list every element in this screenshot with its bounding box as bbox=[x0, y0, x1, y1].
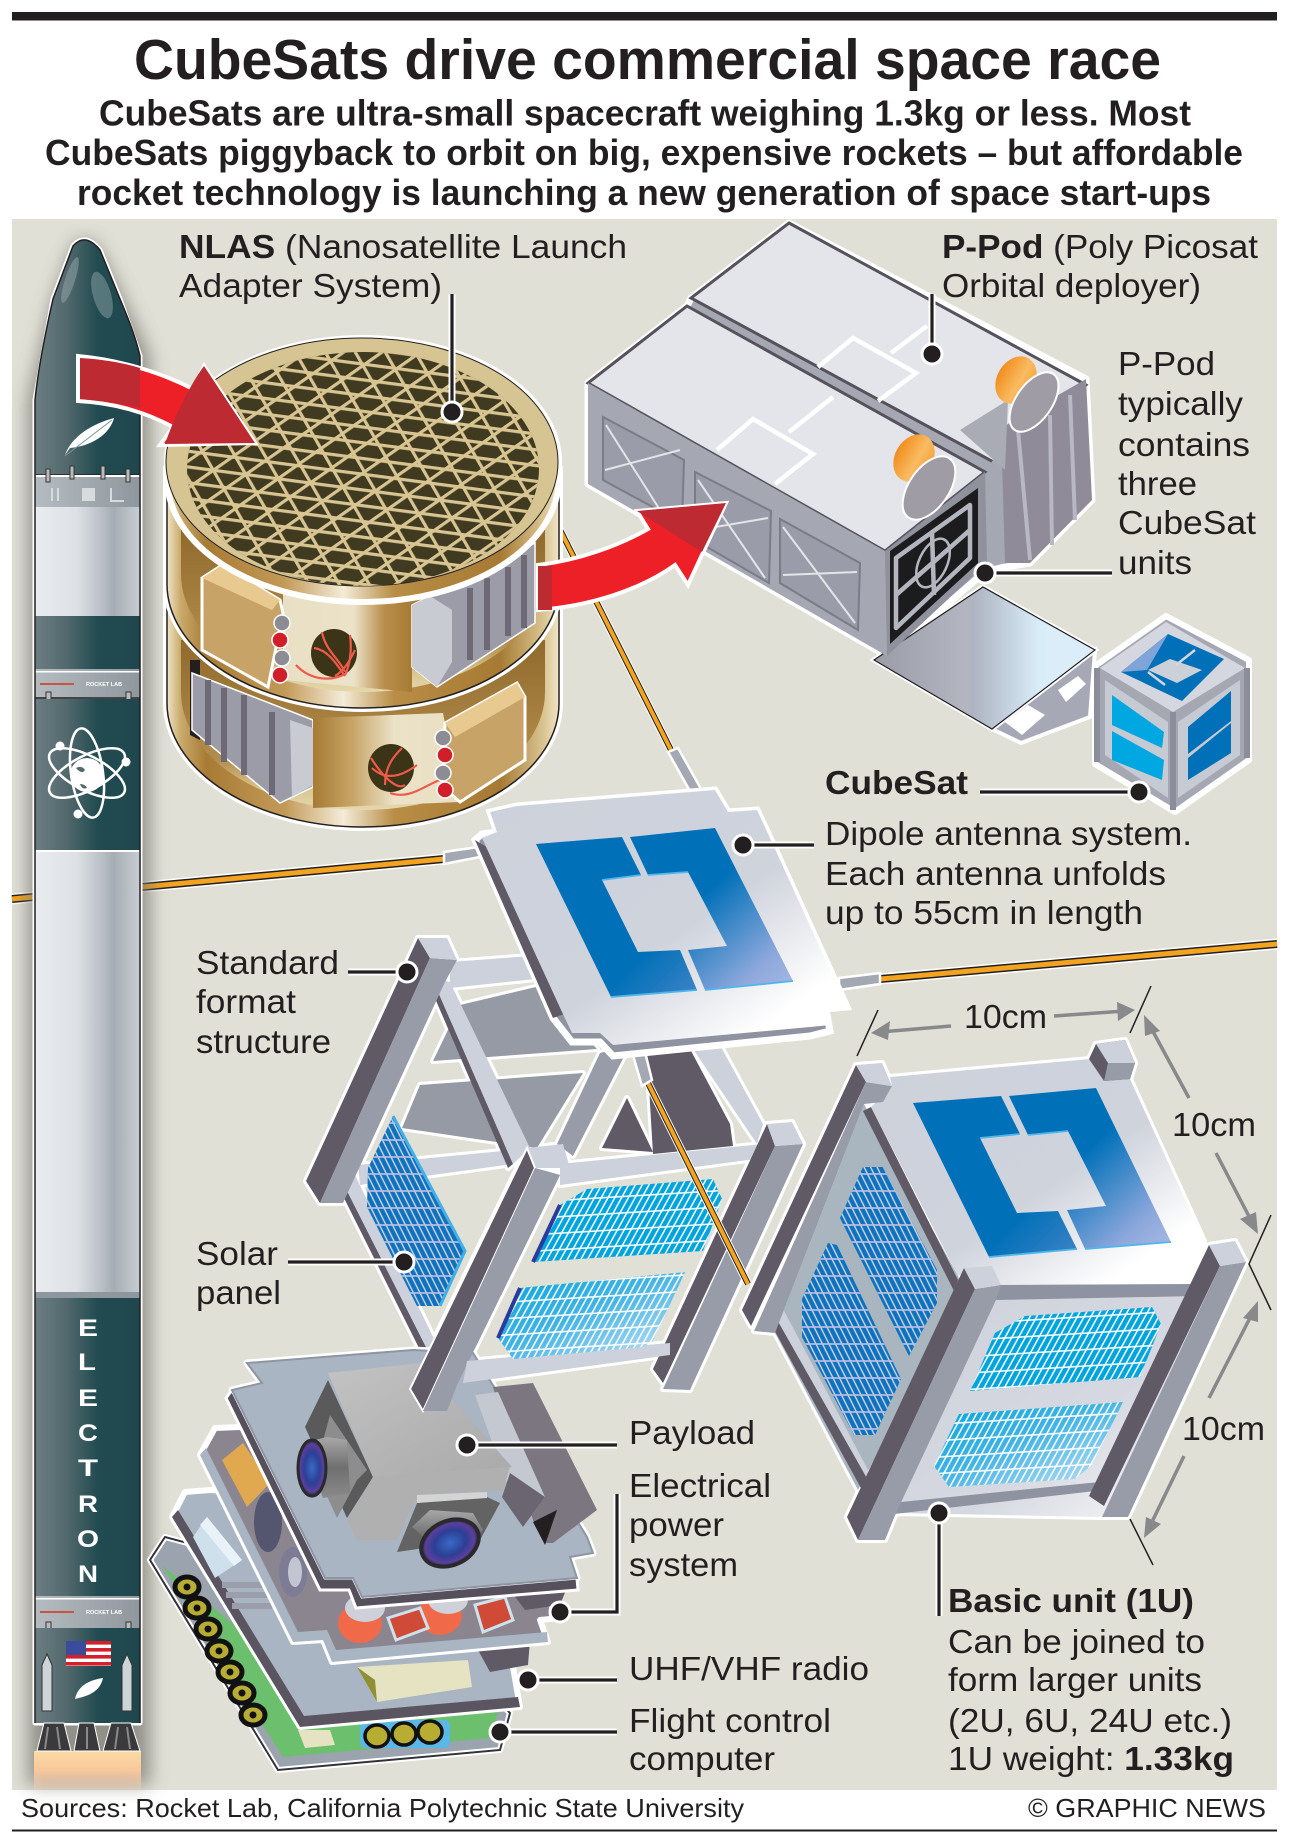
lower dark recess bbox=[190, 660, 200, 740]
orange cylinder rear bbox=[987, 349, 1068, 440]
label: solar panel: Solar bbox=[196, 1236, 278, 1273]
label: basic unit: (2U, 6U, 24U etc.) bbox=[948, 1703, 1232, 1740]
icon: small fern bbox=[75, 1678, 103, 1699]
label: NLAS bbox=[179, 229, 627, 305]
bottom rule bbox=[12, 1830, 1277, 1832]
lower floor bbox=[181, 640, 545, 810]
leader: solar panel bbox=[288, 1252, 414, 1272]
right depth arrow bbox=[1144, 1015, 1258, 1234]
label: NLAS: Adapter System) bbox=[179, 268, 442, 305]
ELECTRON lettering: R bbox=[78, 1491, 98, 1518]
label: solar panel bbox=[196, 1236, 281, 1312]
rear shadow bbox=[960, 400, 1008, 470]
dark cylinder bbox=[254, 1492, 307, 1597]
dimension label lower: 10cm bbox=[1182, 1411, 1265, 1448]
end frame bbox=[885, 472, 987, 656]
label: NLAS: NLAS (Nanosatellite Launch bbox=[179, 229, 627, 266]
camera payload bbox=[298, 1363, 512, 1576]
leader: P-Pod units bbox=[975, 563, 1112, 583]
label: basic unit: form larger units bbox=[948, 1662, 1202, 1699]
upper band bbox=[35, 466, 140, 507]
coil 2 bbox=[418, 1586, 468, 1635]
white crystal box bbox=[193, 1517, 242, 1578]
camera body top bbox=[328, 1363, 512, 1477]
arrow shaded tail bbox=[80, 358, 140, 408]
credit: © GRAPHIC NEWS bbox=[1028, 1793, 1266, 1823]
bus pipes bbox=[222, 1585, 272, 1606]
window outlines bbox=[717, 326, 927, 484]
base section bbox=[35, 1628, 140, 1723]
rocket silhouette bbox=[35, 240, 140, 1723]
label: structure bbox=[196, 945, 339, 1061]
small cube silhouette bbox=[1095, 616, 1249, 812]
door bracket bbox=[992, 650, 1095, 743]
frame front lower corner over stack bbox=[410, 1148, 670, 1411]
icon: atom and globe bbox=[42, 726, 132, 820]
leader: radio bbox=[518, 1670, 617, 1690]
side mount plate bbox=[315, 1415, 367, 1518]
label: dipole antenna bbox=[825, 816, 1192, 932]
leader: electrical power bbox=[550, 1494, 617, 1622]
engines bbox=[37, 1723, 140, 1751]
cube logo right piece bbox=[1009, 1088, 1171, 1249]
label: P-Pod: Orbital deployer) bbox=[942, 268, 1201, 305]
dimension label top: 10cm bbox=[964, 999, 1047, 1036]
lower rocket lab band: ROCKET LAB bbox=[86, 1610, 122, 1616]
subtitle: CubeSats piggyback to orbit on big, expensive rockets – but affordable bbox=[45, 132, 1243, 173]
label: flight control computer: computer bbox=[629, 1741, 775, 1778]
orange cylinder front bbox=[885, 427, 966, 529]
label: electrical power system: power bbox=[629, 1507, 724, 1544]
leader: structure bbox=[348, 962, 417, 982]
plate silhouette bbox=[475, 790, 847, 1056]
arrow shaded tip bbox=[637, 503, 726, 552]
nose cone bbox=[35, 240, 140, 475]
rocket shadow bbox=[28, 240, 150, 1785]
plate top face bbox=[482, 790, 847, 1045]
leader: dipole bbox=[733, 835, 814, 855]
label: P-Pod contents: contains bbox=[1118, 427, 1250, 464]
logo right piece bbox=[630, 828, 793, 990]
end opening bbox=[890, 488, 978, 644]
label: P-Pod contents: P-Pod bbox=[1118, 346, 1215, 383]
standard format frame bbox=[306, 938, 803, 1411]
label: dipole antenna: up to 55cm in length bbox=[825, 895, 1143, 932]
dipole antenna plate bbox=[444, 748, 880, 1086]
ELECTRON lettering: T bbox=[78, 1455, 98, 1482]
lower drum bbox=[167, 590, 559, 827]
label: P-Pod: P-Pod (Poly Picosat bbox=[942, 229, 1259, 266]
arrow shaded tip bbox=[165, 366, 255, 444]
small cube edges bbox=[1097, 668, 1247, 810]
label: dipole antenna: Each antenna unfolds bbox=[825, 856, 1166, 893]
camera dark side bbox=[305, 1380, 373, 1518]
label: P-Pod contents: CubeSat bbox=[1118, 505, 1257, 542]
solar panel: frame left bbox=[367, 1116, 465, 1306]
dark stage section bbox=[35, 616, 140, 669]
top width arrow bbox=[871, 1002, 1135, 1040]
UHF/VHF radio board bbox=[172, 1490, 530, 1727]
label: solar panel: panel bbox=[196, 1275, 281, 1312]
silver main tank bbox=[35, 850, 140, 1298]
bottom connector bbox=[360, 1720, 450, 1748]
pod silhouette bbox=[588, 223, 1092, 656]
coil 1 bbox=[338, 1594, 385, 1643]
label: dipole antenna: Dipole antenna system. bbox=[825, 816, 1192, 853]
small CubeSat bbox=[1095, 616, 1249, 812]
logo highlights bbox=[602, 872, 793, 997]
ELECTRON lettering: O bbox=[77, 1526, 99, 1553]
solar panel: frame lower right bbox=[498, 1272, 685, 1359]
right height arrow bbox=[1144, 1301, 1258, 1538]
cube logo highlights bbox=[980, 1131, 1171, 1257]
door panel bbox=[874, 587, 1095, 729]
ELECTRON lettering: L bbox=[78, 1349, 96, 1376]
lens barrel left bbox=[303, 1437, 350, 1498]
label: P-Pod bbox=[942, 229, 1259, 305]
label: basic unit: Can be joined to bbox=[948, 1624, 1205, 1661]
upper floor bbox=[181, 530, 545, 692]
antenna stubs bbox=[444, 748, 880, 1086]
upper electronics box bbox=[202, 565, 290, 687]
lower cable port bbox=[368, 744, 440, 795]
arrow: rocket to NLAS bbox=[78, 356, 255, 445]
label: electrical power system: Electrical bbox=[629, 1468, 771, 1505]
icon: silver fern bbox=[65, 418, 114, 456]
small cube left face bbox=[1105, 680, 1168, 798]
antenna: right wire bbox=[880, 944, 1277, 979]
logo left piece bbox=[536, 837, 697, 997]
NLAS adapter bbox=[166, 338, 559, 827]
mount plate right bbox=[417, 1492, 487, 1503]
label: basic unit: Basic unit (1U) bbox=[948, 1583, 1194, 1620]
label: structure: structure bbox=[196, 1024, 331, 1061]
leader: basic unit bbox=[929, 1503, 949, 1616]
ELECTRON lettering: E bbox=[78, 1385, 98, 1412]
icon: US flag bbox=[66, 1641, 111, 1666]
leader: payload bbox=[457, 1435, 617, 1455]
basic unit cube bbox=[742, 1040, 1246, 1540]
truss bracing bbox=[605, 425, 857, 623]
rear pod end wall bbox=[985, 445, 1005, 568]
cube solar upper left bbox=[840, 1167, 937, 1356]
label: structure: format bbox=[196, 984, 297, 1021]
small cube logo bbox=[1121, 634, 1224, 701]
cube logo left piece bbox=[913, 1096, 1077, 1257]
gold capacitor bbox=[222, 1443, 270, 1507]
ELECTRON lettering: E bbox=[78, 1315, 98, 1342]
lower rocket lab band bbox=[35, 1596, 140, 1637]
rocket lab band: ROCKET LAB bbox=[86, 682, 122, 688]
mesh lattice bbox=[187, 352, 539, 586]
power block bbox=[510, 1580, 570, 1610]
dimension label right: 10cm bbox=[1172, 1107, 1256, 1144]
lower racks bbox=[192, 673, 313, 803]
front pod side bbox=[588, 383, 887, 656]
fan window bbox=[896, 505, 970, 628]
radio module bbox=[357, 1660, 472, 1702]
rocket edge lines bbox=[35, 475, 140, 1723]
dimension arrows bbox=[857, 986, 1271, 1565]
label: basic unit bbox=[948, 1583, 1234, 1778]
cube solar upper right bbox=[970, 1307, 1161, 1391]
leader: P-Pod bbox=[922, 294, 942, 364]
label: flight control computer bbox=[629, 1703, 831, 1778]
exhaust flame bbox=[34, 1751, 141, 1790]
rear pod top bbox=[691, 223, 1086, 465]
label: P-Pod contents: units bbox=[1118, 545, 1192, 582]
solar panel: frame upper right bbox=[533, 1179, 722, 1262]
camera lower face bbox=[347, 1467, 510, 1540]
header pins column bbox=[175, 1577, 265, 1725]
arrow shaded tail bbox=[538, 566, 552, 610]
antenna: left wire bbox=[12, 859, 444, 899]
resistor 1 bbox=[388, 1608, 428, 1640]
plate left thickness bbox=[475, 840, 567, 1018]
lower electronics box bbox=[435, 683, 525, 802]
arrow: NLAS to P-Pod bbox=[538, 503, 726, 610]
label: electrical power system bbox=[629, 1468, 771, 1584]
label: electrical power system: system bbox=[629, 1547, 738, 1584]
leader: NLAS bbox=[442, 294, 462, 422]
payload board bbox=[226, 1350, 593, 1608]
side fairings bbox=[42, 1654, 132, 1711]
lens left bbox=[298, 1440, 326, 1496]
upper cable port bbox=[296, 629, 357, 679]
label: CubeSat: CubeSat bbox=[825, 765, 968, 802]
top disc rim bbox=[167, 338, 559, 602]
front pod top bbox=[588, 306, 985, 551]
rear pod hinge bracket bbox=[1001, 379, 1092, 563]
small chip bbox=[298, 1730, 335, 1748]
upper racks bbox=[412, 543, 535, 687]
side block bbox=[475, 1383, 597, 1545]
label: P-Pod contents bbox=[1118, 346, 1257, 582]
ELECTRON lettering bbox=[77, 1315, 99, 1588]
sources: Sources: Rocket Lab, California Polytechnic State University bbox=[21, 1793, 744, 1823]
title: CubeSats drive commercial space race bbox=[134, 28, 1161, 92]
stack of circuit boards bbox=[150, 1350, 597, 1770]
resistor 2 bbox=[475, 1597, 513, 1632]
flight control board bbox=[150, 1537, 510, 1770]
lower bulkhead bbox=[313, 713, 460, 808]
ELECTRON lettering: C bbox=[78, 1420, 98, 1447]
antenna: top wire bbox=[540, 490, 674, 756]
upper bulkhead bbox=[283, 590, 412, 692]
lens barrel right bbox=[412, 1510, 483, 1560]
upper drum bbox=[167, 470, 559, 708]
rocket lab band bbox=[35, 669, 140, 707]
small cube top bbox=[1100, 622, 1245, 712]
cube solar lower right bbox=[934, 1402, 1123, 1487]
label: payload: Payload bbox=[629, 1415, 755, 1452]
side truss panels bbox=[603, 417, 860, 630]
lens mount right bbox=[397, 1497, 500, 1552]
leader: CubeSat bbox=[980, 782, 1149, 802]
label: flight control computer: Flight control bbox=[629, 1703, 831, 1740]
P-Pod deployer bbox=[588, 223, 1095, 743]
label: structure: Standard bbox=[196, 945, 339, 982]
leader: flight computer bbox=[490, 1722, 617, 1742]
label: P-Pod contents: typically bbox=[1118, 386, 1243, 423]
top rule bbox=[12, 12, 1277, 20]
radio heatsink block bbox=[478, 1640, 530, 1672]
subtitle bbox=[45, 92, 1243, 213]
cube solar lower left bbox=[802, 1243, 901, 1435]
subtitle: CubeSats are ultra-small spacecraft weighing 1.3kg or less. Most bbox=[99, 92, 1191, 134]
antenna: lower wire bbox=[647, 1081, 748, 1284]
lens right bbox=[414, 1510, 486, 1576]
subtitle: rocket technology is launching a new generation of space start-ups bbox=[77, 172, 1211, 213]
small cube right face bbox=[1178, 680, 1240, 798]
header pin holes bbox=[184, 1584, 256, 1718]
electrical power board bbox=[200, 1427, 570, 1662]
nose highlights bbox=[58, 256, 117, 321]
dark first stage bbox=[35, 1298, 140, 1596]
dark stage with atom bbox=[35, 699, 140, 850]
rocket: Electron bbox=[34, 240, 141, 1790]
top disc surface bbox=[166, 338, 558, 586]
ELECTRON lettering: N bbox=[78, 1561, 98, 1588]
label: P-Pod contents: three bbox=[1118, 466, 1197, 503]
label: basic unit: 1U weight: 1.33kg bbox=[948, 1741, 1234, 1778]
silver tank upper bbox=[35, 507, 140, 616]
dimension ticks bbox=[857, 986, 1271, 1565]
label: radio: UHF/VHF radio bbox=[629, 1651, 869, 1688]
